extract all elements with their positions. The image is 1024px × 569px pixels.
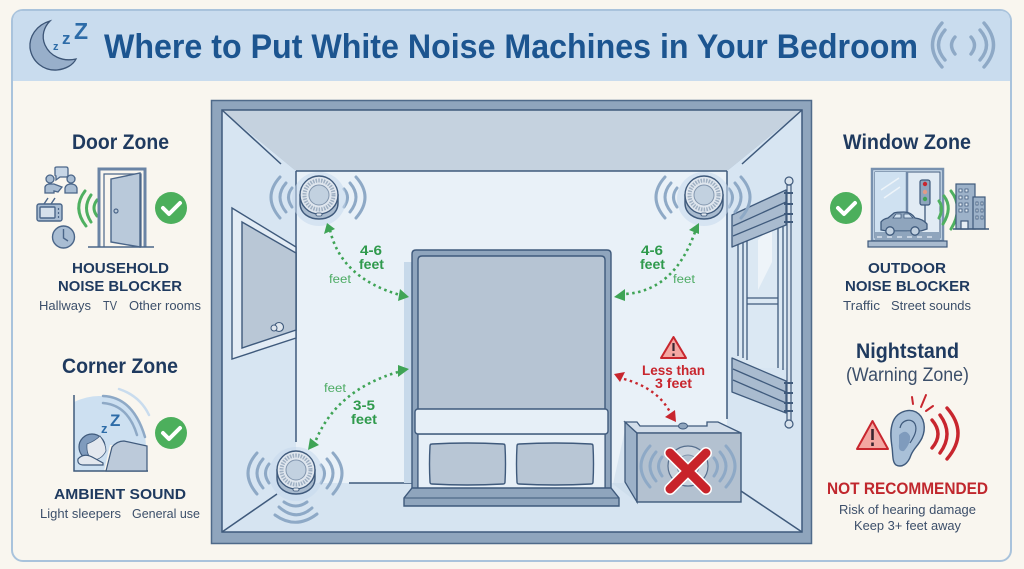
pillow right [516, 443, 594, 485]
icon: green waves [939, 191, 958, 229]
label: 3-5 feet [324, 383, 377, 427]
text: corner uses [40, 507, 200, 521]
icon: moon and zzz: z [53, 41, 59, 53]
heading: door zone: Door Zone [72, 131, 169, 154]
icon: moon and zzz: Z [74, 18, 88, 44]
icon: window with traffic [868, 169, 947, 247]
floor [222, 483, 802, 532]
icon: moon and zzz: z [62, 29, 70, 48]
icon: buildings [953, 184, 989, 229]
arrow: top right to bed [614, 223, 699, 301]
icon: sound waves green [79, 191, 97, 226]
label: 3-5 feet: feet [351, 411, 377, 427]
panel: nightstand warning zone [827, 340, 988, 533]
heading: nightstand: Nightstand [856, 340, 959, 363]
text: corner uses: General use [132, 507, 200, 521]
icon: red x [670, 453, 706, 489]
curtain rod [784, 177, 793, 428]
label: outdoor noise blocker: OUTDOOR [868, 260, 946, 277]
icon: sleeper in corner: Z [110, 411, 120, 430]
text: risk note: Risk of hearing damage [839, 503, 976, 517]
icon: tv [37, 198, 62, 221]
label: 4-6 feet left: feet [359, 256, 384, 272]
header band [13, 11, 1010, 81]
panel: bedroom floor plan [212, 100, 812, 544]
label: household noise blocker: NOISE BLOCKER [58, 278, 182, 295]
label: not recommended: NOT RECOMMENDED [827, 480, 988, 498]
panel: door zone [37, 131, 201, 313]
text: door uses: Hallways [39, 299, 91, 313]
text: window uses: Traffic [843, 299, 880, 313]
text: risk note [839, 503, 976, 533]
text: corner uses: Light sleepers [40, 507, 121, 521]
icon: sound waves [932, 23, 994, 67]
label: ambient sound: AMBIENT SOUND [54, 486, 186, 503]
icon: ear [891, 411, 924, 466]
label: 4-6 feet left [329, 242, 384, 286]
label: 4-6 feet left: feet [329, 274, 352, 286]
icon: open door [88, 169, 154, 247]
label: 4-6 feet right: 4-6 [641, 242, 663, 258]
panel: corner zone [40, 355, 200, 521]
icon: red waves and rays [912, 395, 958, 459]
subheading: warning zone: (Warning Zone) [846, 365, 969, 386]
label: outdoor noise blocker [845, 260, 970, 295]
arrow: nightstand to bed [614, 372, 676, 422]
right window with blinds [732, 177, 793, 428]
back wall [296, 171, 727, 483]
left wall [222, 110, 296, 532]
text: risk note: Keep 3+ feet away [854, 519, 962, 533]
label: 3-5 feet: feet [324, 383, 347, 395]
title: Where to Put White Noise Machines in Your Bedroom [104, 28, 918, 66]
room frame [212, 100, 812, 544]
icon: check [155, 192, 187, 224]
label: household noise blocker: HOUSEHOLD [72, 260, 169, 277]
text: door uses [39, 299, 201, 313]
icon: check [155, 417, 187, 449]
blind upper [732, 190, 786, 247]
label: less than 3 feet [642, 362, 705, 391]
speaker: top right [656, 172, 750, 226]
label: 4-6 feet right: feet [673, 274, 696, 286]
blind lower [732, 358, 786, 413]
label: outdoor noise blocker: NOISE BLOCKER [845, 278, 970, 295]
bed [404, 250, 619, 506]
icon: moon and zzz [30, 18, 88, 70]
text: door uses: Other rooms [129, 299, 201, 313]
icon: sleeper in corner: z [101, 421, 108, 436]
text: door uses: TV [103, 299, 118, 313]
text: window uses [843, 299, 971, 313]
heading: corner zone: Corner Zone [62, 355, 178, 378]
label: 4-6 feet left: 4-6 [360, 242, 382, 258]
heading: window zone: Window Zone [843, 131, 971, 154]
label: less than 3 feet: Less than [642, 362, 705, 378]
right wall [727, 110, 802, 532]
label: 4-6 feet right: feet [640, 256, 665, 272]
left window or door on wall [232, 208, 296, 359]
text: window uses: Street sounds [891, 299, 971, 313]
icon: warning triangle [857, 421, 888, 449]
icon: check [830, 192, 862, 224]
pillow left [430, 443, 506, 485]
label: 3-5 feet: 3-5 [353, 397, 375, 413]
speaker: bottom left [248, 447, 342, 522]
car [881, 212, 927, 231]
label: household noise blocker [58, 260, 182, 295]
room lines [222, 110, 802, 532]
label: less than 3 feet: 3 feet [655, 375, 692, 391]
icon: clock [52, 226, 74, 248]
speaker: top left [271, 172, 365, 226]
arrow: bottom left to bed [308, 365, 409, 450]
arrow: top left to bed [324, 223, 409, 301]
icon: warning triangle [661, 337, 686, 358]
nightstand [613, 422, 741, 502]
label: 4-6 feet right [640, 242, 696, 286]
icon: people talking [45, 167, 77, 193]
traffic light [924, 205, 926, 222]
panel: window zone [830, 131, 989, 313]
ceiling [222, 110, 802, 171]
icon: sleeper in corner [74, 389, 149, 471]
